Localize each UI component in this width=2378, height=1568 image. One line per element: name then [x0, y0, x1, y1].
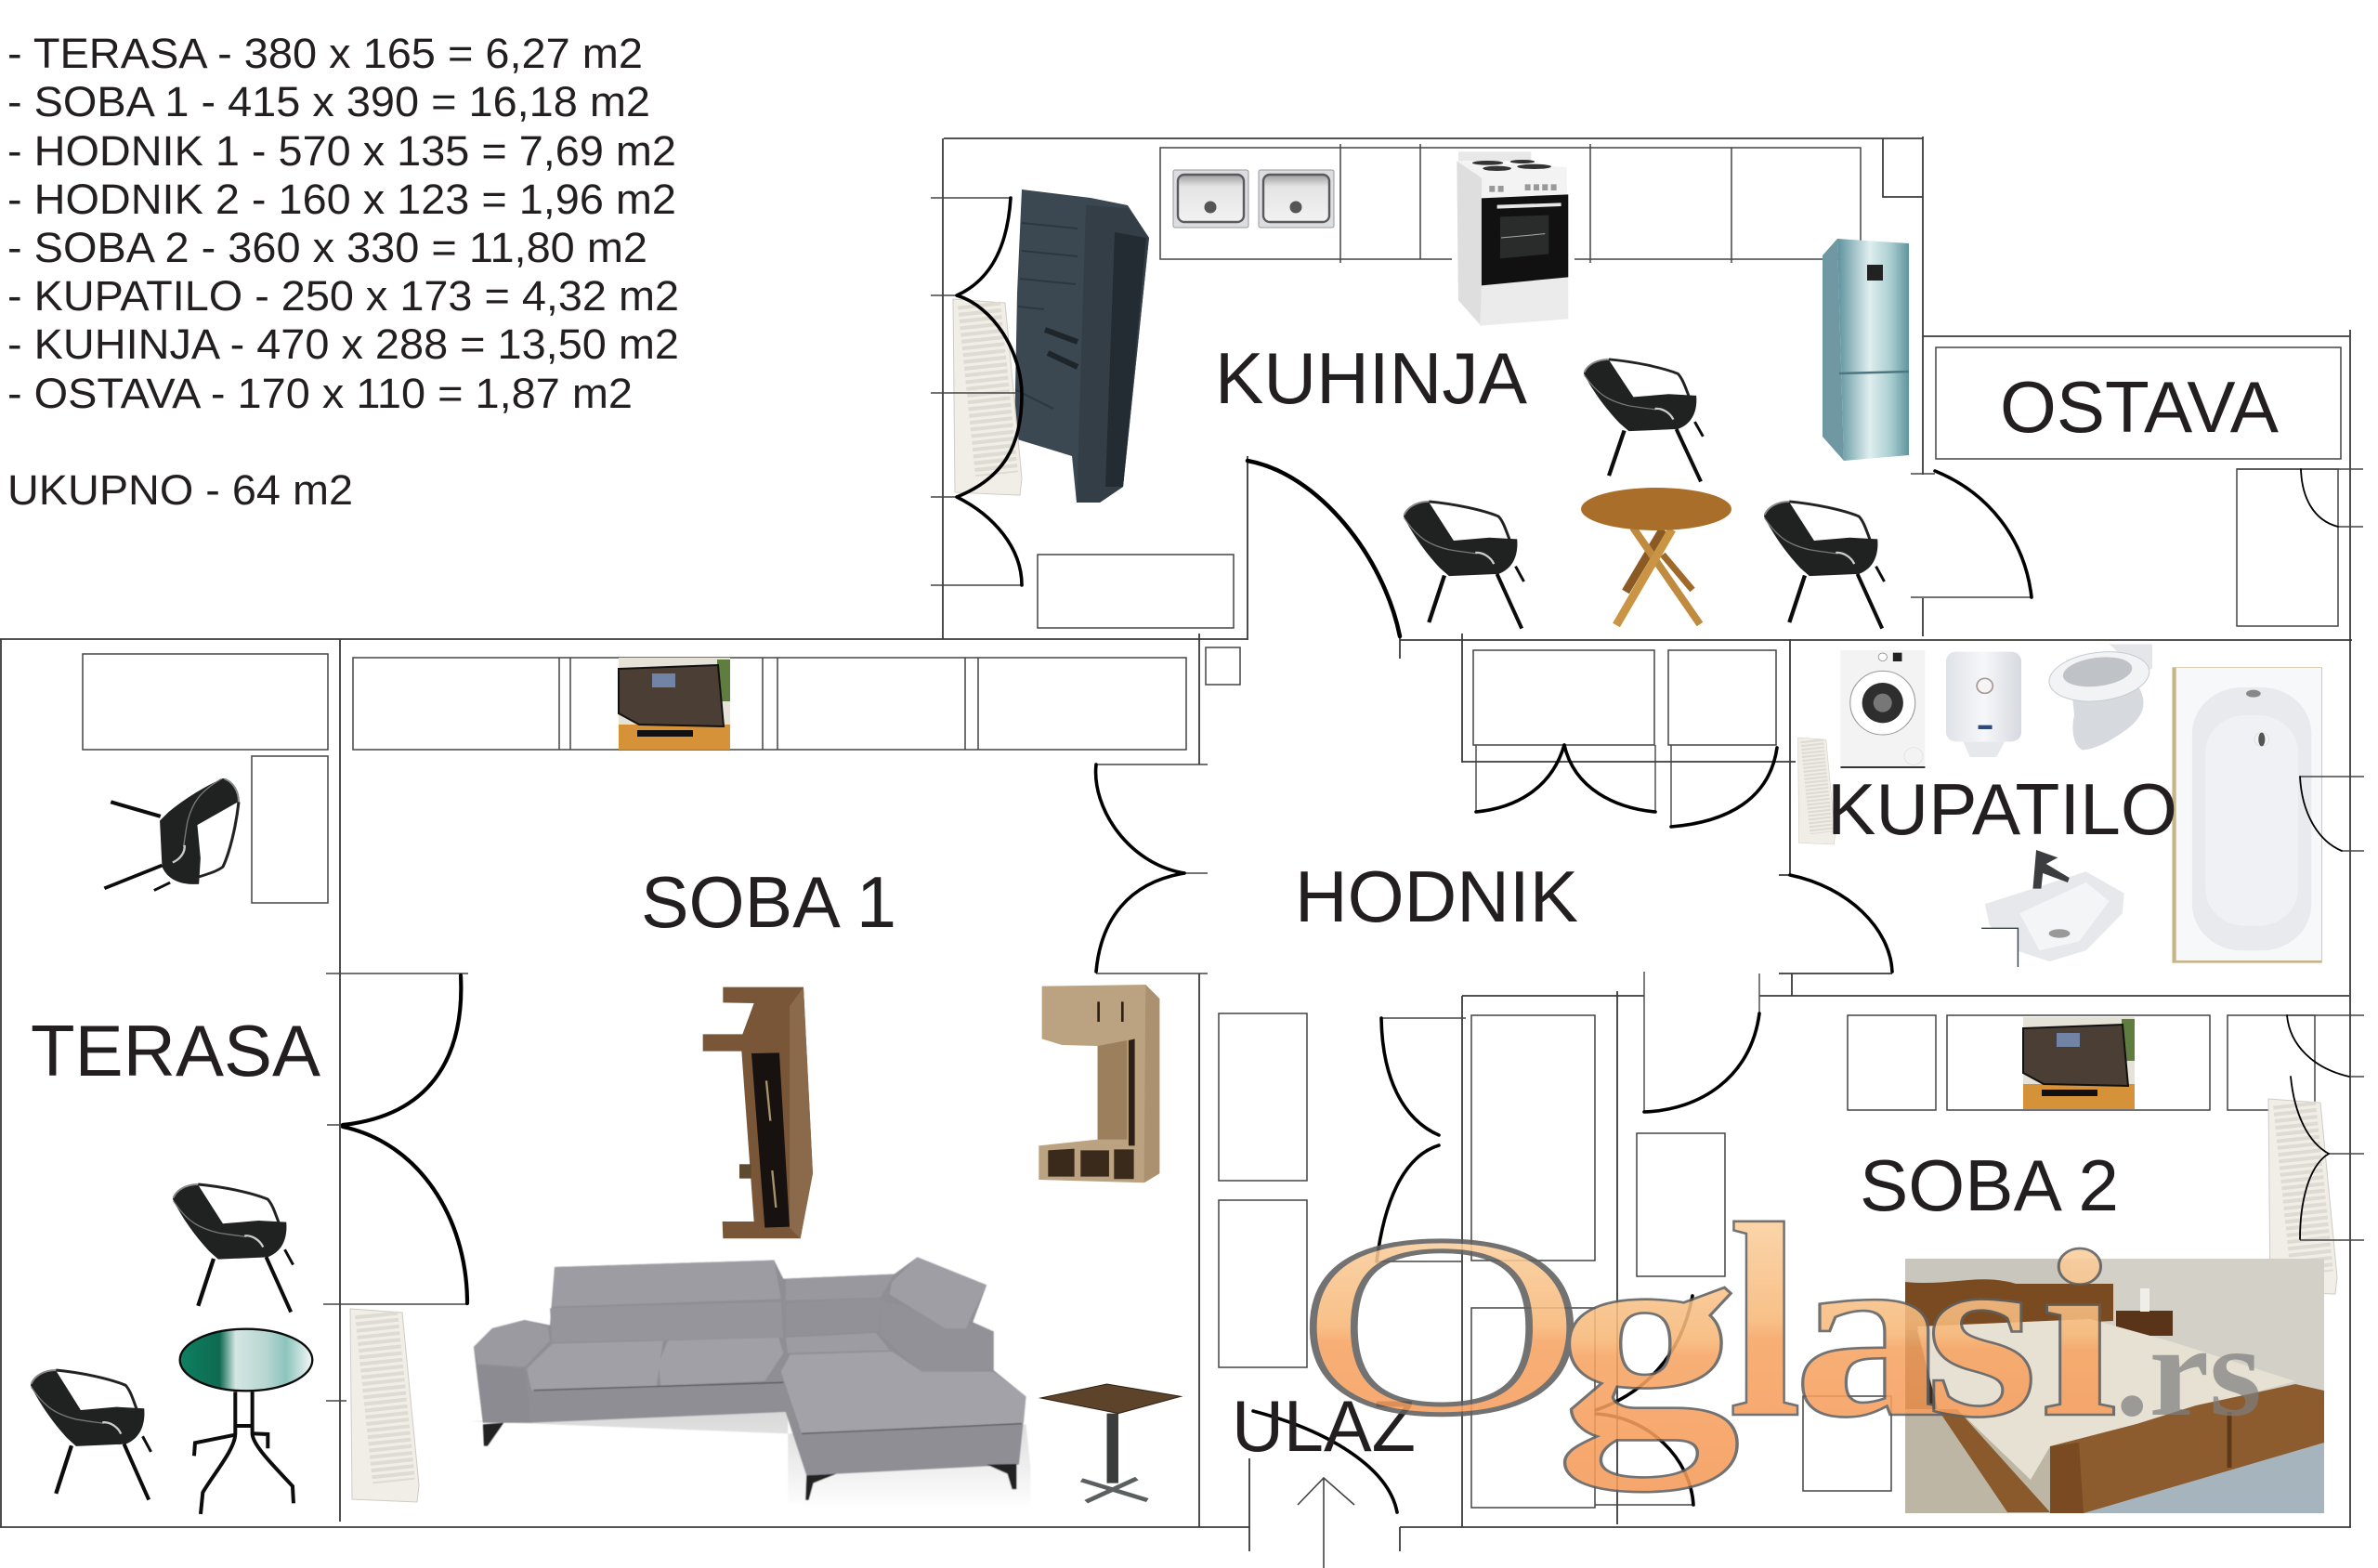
watermark logo: Oglasi.rs: i — [2040, 1201, 2118, 1467]
icon: kitchen chair, left — [1404, 502, 1524, 629]
room label: KUHINJA: KUHINJA — [1215, 337, 1527, 419]
watermark logo: Oglasi.rs: g — [1555, 1183, 1741, 1496]
text block: room areas list: - OSTAVA - 170 x 110 = 1,87 m2 — [7, 370, 633, 417]
icon: radiator, bedroom — [2268, 1099, 2337, 1294]
door swings — [323, 198, 2364, 1512]
icon: stove — [1452, 150, 1574, 333]
watermark logo: Oglasi.rs: a — [1793, 1197, 1947, 1469]
text block: room areas list: - HODNIK 1 - 570 x 135 = 7,69 m2 — [7, 127, 676, 175]
room label: KUPATILO: KUPATILO — [1827, 768, 2177, 850]
icon: wash basin — [1981, 850, 2124, 967]
text block: room areas list: - KUHINJA - 470 x 288 = 13,50 m2 — [7, 320, 679, 368]
text block: room areas list: - KUPATILO - 250 x 173 = 4,32 m2 — [7, 272, 679, 320]
watermark logo: Oglasi.rs: O — [1297, 1183, 1587, 1469]
icon: radiator, kitchen — [953, 299, 1022, 495]
icon: wooden desk — [703, 987, 813, 1238]
room label: SOBA 2: SOBA 2 — [1860, 1144, 2119, 1226]
icon: bathtub — [2172, 667, 2322, 963]
icon: square side table — [1040, 1384, 1181, 1502]
icon: entrance arrow — [1298, 1478, 1354, 1568]
icon: wooden wardrobe — [1039, 985, 1159, 1183]
icon: glass terrace table — [180, 1329, 312, 1514]
icon: terrace chair, lower — [31, 1370, 151, 1500]
text block: room areas list: - SOBA 2 - 360 x 330 = 11,80 m2 — [7, 224, 647, 271]
room label: ULAZ: ULAZ — [1232, 1385, 1416, 1467]
watermark logo: Oglasi.rs — [1297, 1167, 2262, 1496]
text block: room areas list: - HODNIK 2 - 160 x 123 = 1,96 m2 — [7, 176, 676, 223]
icon: round wooden table — [1581, 488, 1731, 625]
room label: OSTAVA: OSTAVA — [2000, 366, 2279, 448]
watermark logo: Oglasi.rs: l — [1728, 1167, 1802, 1475]
text block: room areas list: UKUPNO - 64 m2 — [7, 466, 353, 514]
icon: toilet — [2045, 644, 2152, 750]
bathroom fixtures — [1840, 644, 2322, 967]
icon: television, living room — [619, 658, 730, 750]
text block: room areas list: - SOBA 1 - 415 x 390 = 16,18 m2 — [7, 78, 650, 125]
icon: television, bedroom — [2023, 1017, 2135, 1109]
icon: terrace chair, rotated — [104, 778, 239, 891]
text block: room areas list — [7, 30, 679, 514]
icon: corner sofa — [469, 1257, 1030, 1509]
room label: SOBA 1: SOBA 1 — [641, 861, 896, 943]
photo: bedroom bed — [1905, 1259, 2324, 1513]
icon: terrace chair, upper — [173, 1184, 294, 1312]
icon: kitchen chair, top — [1584, 359, 1703, 481]
watermark logo: Oglasi.rs: .rs — [2115, 1300, 2262, 1444]
icon: fridge — [1823, 239, 1909, 461]
icon: corner bench — [1014, 189, 1149, 503]
icon: double sink — [1173, 170, 1334, 228]
icon: kitchen chair, right — [1764, 502, 1885, 629]
room label: TERASA: TERASA — [31, 1010, 320, 1091]
text block: room areas list: - TERASA - 380 x 165 = 6,27 m2 — [7, 30, 643, 77]
icon: radiator, terrace — [350, 1309, 419, 1502]
icon: radiator, bathroom — [1798, 738, 1836, 844]
icon: washing machine — [1840, 650, 1925, 768]
room label: HODNIK: HODNIK — [1295, 856, 1578, 937]
icon: water boiler — [1946, 652, 2021, 757]
watermark logo: Oglasi.rs: s — [1925, 1197, 2038, 1469]
